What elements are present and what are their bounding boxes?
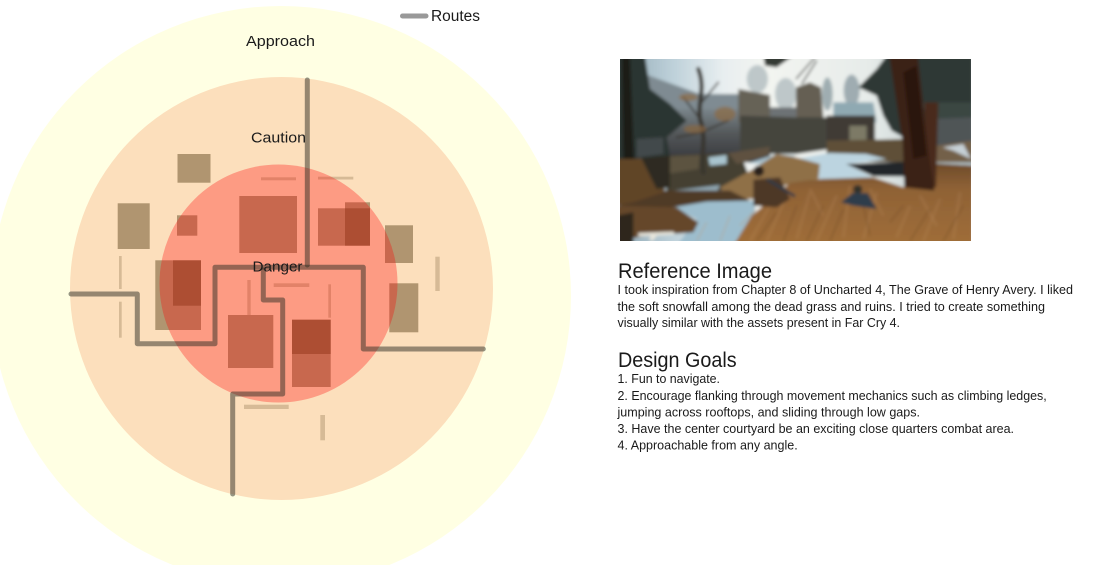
paragraph: reference description — [618, 282, 1073, 330]
legend: routes — [402, 8, 480, 25]
list: goals: 1. Fun to navigate. — [618, 371, 720, 386]
pond and small water — [708, 155, 727, 166]
list: goals: 3. Have the center courtyard be an exciting close quarters combat area. — [618, 421, 1014, 436]
panel: level map diagram — [0, 6, 571, 565]
left bank and water — [620, 191, 753, 216]
text block: design goals — [617, 349, 1047, 452]
right foliage — [858, 56, 973, 139]
characters — [753, 166, 877, 209]
left brush — [617, 156, 670, 206]
list: goals: 4. Approachable from any angle. — [618, 437, 798, 452]
ground behind water — [827, 139, 907, 162]
buildings — [118, 154, 418, 387]
label: danger: Danger — [252, 259, 302, 276]
left tree — [617, 56, 687, 159]
routes — [71, 80, 483, 494]
paragraph: reference description: I took inspiration from Chapter 8 of Uncharted 4, The Grave of Henry Avery. I liked — [618, 282, 1073, 297]
text block: reference image — [618, 260, 1073, 330]
zone: danger circle — [160, 164, 398, 402]
bare tree — [677, 69, 728, 172]
big trunk — [924, 102, 938, 187]
paragraph: reference description: the soft snowfall among the dead grass and ruins. I tried to create something — [618, 299, 1045, 314]
ruins — [738, 89, 770, 122]
list: goals — [617, 371, 1047, 452]
paragraph: reference description: visually similar with the assets present in Far Cry 4. — [618, 315, 900, 330]
list: goals: 2. Encourage flanking through movement mechanics such as climbing ledges, — [618, 388, 1047, 403]
low walls — [119, 177, 440, 440]
dirt mound — [720, 154, 820, 199]
left ground — [667, 152, 753, 196]
zone: approach circle — [0, 6, 571, 565]
main stream — [787, 153, 887, 180]
haze and distant mountain — [646, 74, 741, 112]
midground — [663, 109, 770, 162]
bush — [728, 147, 770, 164]
heading: design goals: Design Goals — [618, 349, 737, 372]
label: approach: Approach — [246, 33, 315, 50]
heading: reference image: Reference Image — [618, 260, 772, 283]
list: goals: jumping across rooftops, and sliding through low gaps. — [617, 405, 920, 420]
reference image: game scene — [620, 59, 971, 241]
legend: routes: Routes — [431, 8, 480, 25]
foreground grass — [733, 164, 973, 246]
weapon hud — [638, 232, 675, 240]
dead branches — [796, 57, 817, 84]
zone: caution circle — [70, 77, 493, 500]
label: caution: Caution — [251, 130, 306, 147]
